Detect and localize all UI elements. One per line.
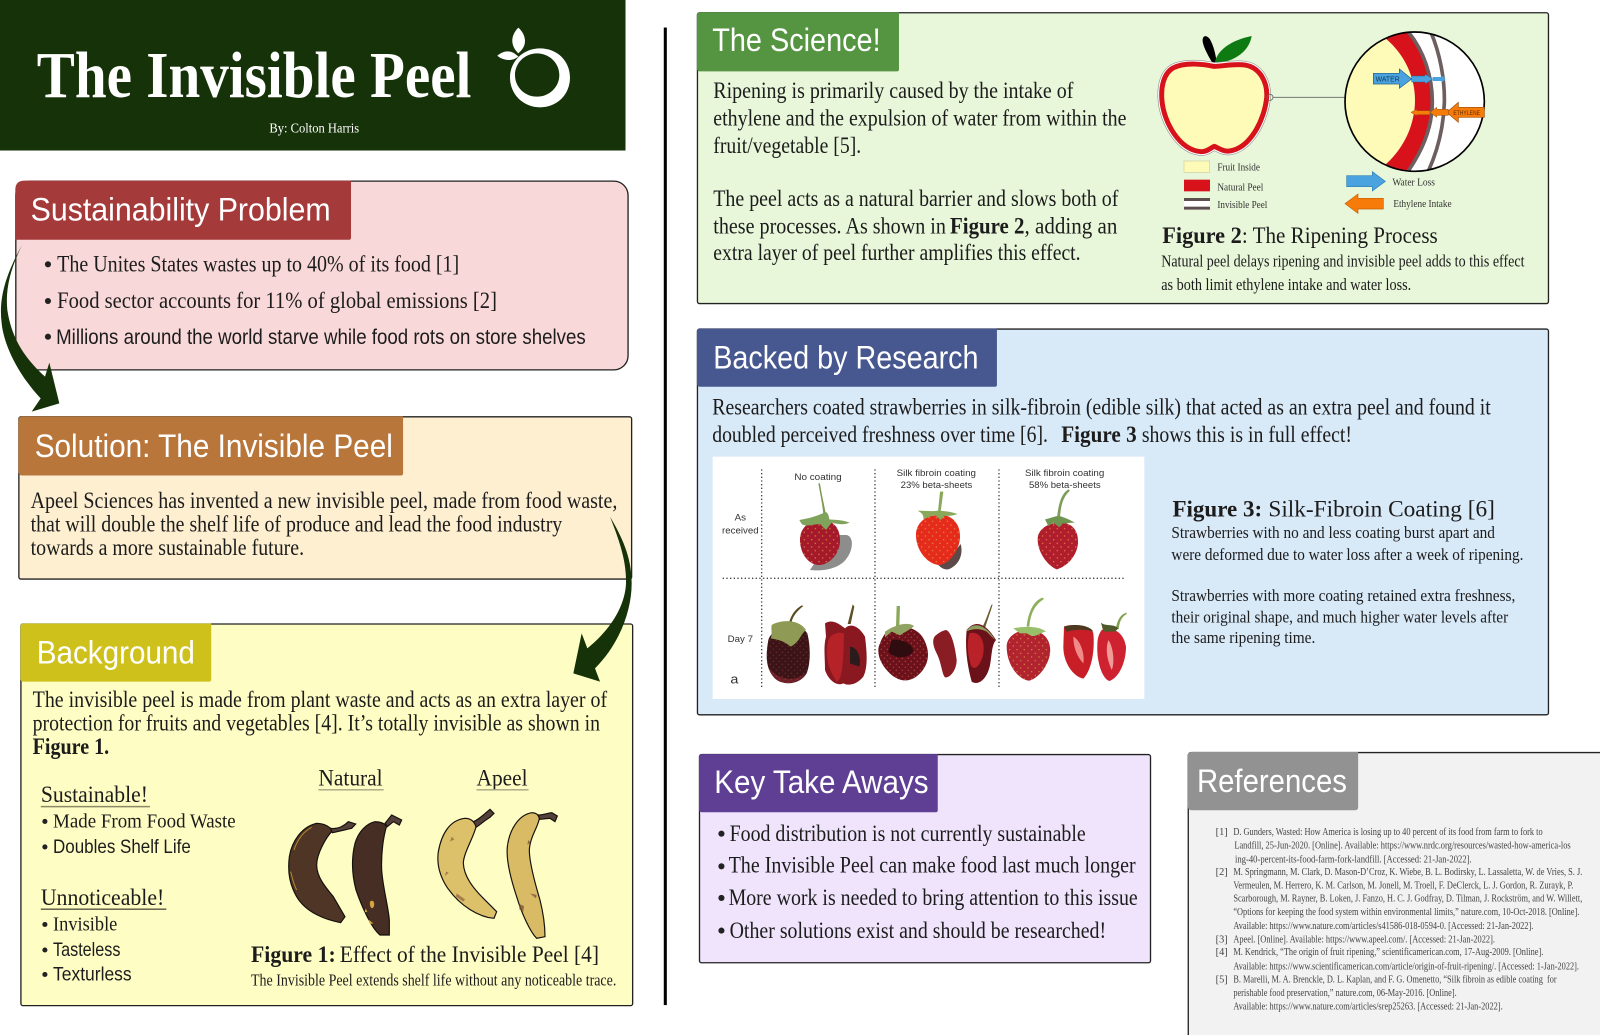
- problem bullets: Millions around the world starve while food rots on store shelves: [56, 325, 586, 349]
- science text: , adding an: [1024, 214, 1118, 240]
- icon: yellow banana two: [507, 813, 557, 938]
- figure 3 caption: Figure 3:: [1172, 496, 1262, 522]
- figure 2: ripening diagram: [1162, 27, 1490, 213]
- list: unnoticeable: Unnoticeable!: [41, 885, 164, 911]
- take away bullets: Food distribution is not currently sustainable: [730, 821, 1086, 847]
- figure 1 caption: [251, 942, 616, 990]
- figure 3 caption: [1171, 496, 1523, 647]
- list: unnoticeable: Invisible: [53, 914, 117, 936]
- reference list: Apeel. [Online]. Available: https://www.apeel.com/. [Accessed: 21-Jan-2022].: [1233, 934, 1495, 945]
- label: apeel: Apeel: [477, 766, 528, 792]
- background text: [33, 687, 607, 760]
- figure 2 caption: as both limit ethylene intake and water loss.: [1161, 275, 1411, 294]
- panel: the science: [697, 12, 1548, 304]
- reference list: [1]: [1216, 827, 1228, 838]
- legend: peel key: Natural Peel: [1217, 182, 1263, 193]
- icon: apeel logo: [497, 28, 570, 107]
- divider: [664, 28, 667, 1005]
- magnified peel circle: [1344, 31, 1486, 172]
- panel: key take aways: [699, 754, 1151, 963]
- reference list: ing-40-percent-its-food-farm-fork-landfill. [Accessed: 21-Jan-2022].: [1235, 854, 1472, 865]
- figure 1 caption: Effect of the Invisible Peel [4]: [340, 942, 599, 968]
- reference list: [5]: [1216, 974, 1228, 985]
- heading: the science: The Science!: [712, 21, 881, 58]
- problem bullets: The Unites States wastes up to 40% of its food [1]: [57, 251, 459, 277]
- science text: extra layer of peel further amplifies this effect.: [713, 240, 1081, 266]
- water arrows: WATER: [1376, 75, 1400, 84]
- heading: background: Background: [37, 633, 195, 670]
- list: unnoticeable: [41, 885, 166, 986]
- column labels: No coating: [794, 472, 842, 482]
- panel: solution: [18, 416, 632, 579]
- panel: references: [1188, 752, 1600, 1035]
- reference list: [4]: [1216, 947, 1228, 958]
- background text: The invisible peel is made from plant waste and acts as an extra layer of: [33, 687, 607, 713]
- science text: Ripening is primarily caused by the intake of: [713, 78, 1074, 104]
- heading: background: [20, 623, 211, 682]
- science text: these processes. As shown in: [713, 214, 946, 240]
- list: unnoticeable: Texturless: [53, 964, 132, 986]
- legend: arrows key: Water Loss: [1392, 177, 1435, 188]
- science text: ethylene and the expulsion of water from within the: [713, 106, 1127, 132]
- background text: Figure 1.: [33, 734, 109, 760]
- figure 3 caption: Strawberries with more coating retained extra freshness,: [1171, 586, 1515, 605]
- row labels: a: [730, 671, 739, 686]
- icon: yellow banana one: [438, 809, 497, 918]
- banana illustrations: [289, 809, 557, 938]
- research text: [712, 394, 1491, 448]
- legend: peel key: Fruit Inside: [1217, 163, 1260, 174]
- list: sustainable: Made From Food Waste: [53, 811, 236, 833]
- figure 1: bananas: [251, 766, 616, 990]
- figure 2 caption: Natural peel delays ripening and invisible peel adds to this effect: [1161, 251, 1525, 270]
- ethylene arrows: [1411, 102, 1484, 122]
- reference list: [1216, 827, 1582, 1012]
- heading: solution: [18, 416, 403, 476]
- reference list: Available: https://www.nature.com/articles/srep25263. [Accessed: 21-Jan-2022].: [1233, 1001, 1503, 1012]
- problem bullets: Food sector accounts for 11% of global emissions [2]: [57, 288, 497, 314]
- solution text: [31, 488, 617, 561]
- legend: arrows key: [1345, 172, 1452, 213]
- byline: By: Colton Harris: [269, 121, 359, 136]
- figure 2 caption: : The Ripening Process: [1242, 223, 1438, 249]
- solution text: that will double the shelf life of produce and lead the food industry: [31, 512, 562, 538]
- figure 2 caption: [1161, 223, 1525, 294]
- take away bullets: The Invisible Peel can make food last much longer: [729, 852, 1136, 878]
- background text: protection for fruits and vegetables [4]. It’s totally invisible as shown in: [33, 711, 600, 737]
- solution text: towards a more sustainable future.: [31, 535, 304, 561]
- icon: apple: [1162, 36, 1267, 152]
- strawberry: no coating as received: [799, 483, 852, 570]
- label: natural: Natural: [318, 766, 383, 792]
- column labels: 58% beta-sheets: [1029, 480, 1101, 490]
- row labels: Day 7: [728, 634, 753, 644]
- column labels: 23% beta-sheets: [901, 480, 973, 490]
- arrow: problem to solution: [1, 245, 59, 412]
- grid lines: [723, 469, 1125, 688]
- heading: key take aways: Key Take Aways: [714, 763, 929, 800]
- row labels: received: [722, 525, 759, 535]
- strawberries: 23 percent day 7: [878, 604, 996, 683]
- reference list: perishable food preservation,” nature.com, 06-May-2016. [Online].: [1233, 988, 1457, 999]
- science text: fruit/vegetable [5].: [713, 133, 861, 159]
- figure 3 caption: the same ripening time.: [1171, 628, 1315, 647]
- research text: shows this is in full effect!: [1142, 422, 1352, 448]
- strawberry: 58 percent as received: [1038, 489, 1078, 569]
- figure 3 caption: their original shape, and much higher water levels after: [1171, 607, 1508, 626]
- list: unnoticeable: Tasteless: [53, 939, 120, 961]
- legend: arrows key: Ethylene Intake: [1393, 199, 1452, 210]
- strawberries: 58 percent day 7: [1007, 598, 1127, 681]
- heading: references: References: [1197, 762, 1347, 799]
- heading: the science: [697, 12, 899, 71]
- research text: Figure 3: [1061, 422, 1137, 448]
- column labels: [794, 468, 1104, 490]
- heading: backed by research: Backed by Research: [713, 338, 979, 375]
- science text: The peel acts as a natural barrier and slows both of: [713, 186, 1119, 212]
- figure 3 caption: Strawberries with no and less coating burst apart and: [1171, 523, 1495, 542]
- list: sustainable: [41, 782, 236, 858]
- row labels: As: [735, 513, 747, 523]
- legend: peel key: [1184, 161, 1267, 211]
- panel: sustainability problem: [15, 181, 628, 370]
- header banner: [0, 0, 626, 151]
- take away bullets: [718, 821, 1138, 944]
- ethylene arrows: ETHYLENE: [1453, 110, 1480, 117]
- strawberry: 23 percent as received: [916, 492, 962, 569]
- research text: doubled perceived freshness over time [6].: [712, 422, 1048, 448]
- science text: Figure 2: [950, 214, 1024, 240]
- heading: solution: Solution: The Invisible Peel: [35, 427, 393, 464]
- strawberries: no coating day 7: [767, 604, 867, 685]
- heading: references: [1188, 752, 1358, 810]
- figure 1 caption: The Invisible Peel extends shelf life without any noticeable trace.: [251, 971, 616, 990]
- column labels: Silk fibroin coating: [897, 468, 976, 478]
- figure 2 caption: Figure 2: [1162, 223, 1242, 249]
- solution text: Apeel Sciences has invented a new invisible peel, made from food waste,: [31, 488, 617, 514]
- reference list: [2]: [1216, 867, 1228, 878]
- panel: backed by research: [697, 329, 1548, 715]
- figure 3 caption: Silk-Fibroin Coating [6]: [1268, 496, 1495, 522]
- science text: [713, 78, 1127, 266]
- icon: brown banana one: [289, 822, 356, 923]
- title: The Invisible Peel: [37, 40, 471, 112]
- figure 1 caption: Figure 1:: [251, 942, 336, 968]
- column labels: Silk fibroin coating: [1025, 468, 1104, 478]
- take away bullets: More work is needed to bring attention to this issue: [729, 885, 1138, 911]
- figure 3: strawberry photo grid: [713, 457, 1144, 699]
- panel: background: [20, 623, 633, 1006]
- heading: backed by research: [697, 329, 997, 387]
- row labels: [722, 513, 759, 686]
- arrow: solution to background: [573, 517, 632, 682]
- take away bullets: Other solutions exist and should be researched!: [730, 918, 1106, 944]
- heading: sustainability problem: [15, 181, 351, 240]
- heading: key take aways: [699, 754, 938, 812]
- water arrows: [1373, 69, 1446, 88]
- heading: sustainability problem: Sustainability Problem: [31, 190, 331, 227]
- connector line: [1267, 94, 1345, 100]
- problem bullets: [45, 251, 586, 349]
- reference list: [3]: [1216, 934, 1228, 945]
- icon: brown banana two: [353, 815, 402, 935]
- list: sustainable: Doubles Shelf Life: [53, 836, 191, 858]
- figure 3 caption: were deformed due to water loss after a week of ripening.: [1171, 545, 1523, 564]
- list: sustainable: Sustainable!: [41, 782, 148, 808]
- reference list: Available: https://www.nature.com/articles/s41586-018-0594-0. [Accessed: 21-Jan-2022].: [1233, 921, 1533, 932]
- legend: peel key: Invisible Peel: [1217, 200, 1267, 211]
